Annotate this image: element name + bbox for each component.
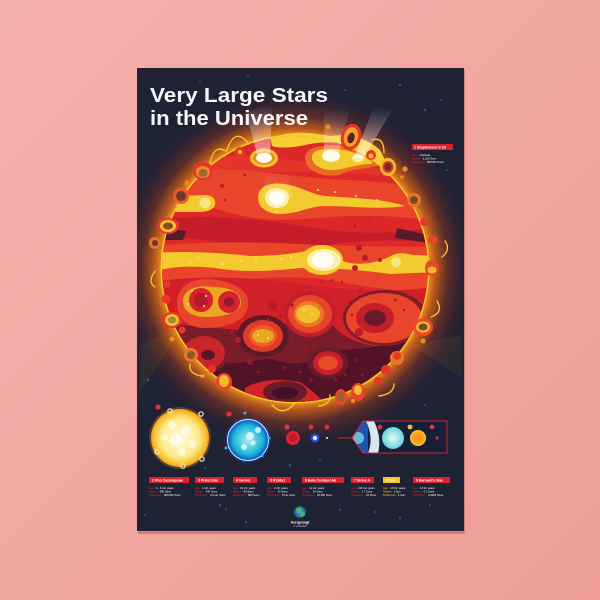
ring spot right [356,303,394,333]
hot core centre band [301,245,343,275]
bottom dark spot [263,381,307,403]
caption: R136a1: Radius: 30 Suns [267,490,288,494]
dark purple patches [165,230,186,240]
label: 1 Stephenson 2-18 [412,144,453,164]
star: Sirius A [378,425,404,449]
caption: R136a1 [267,477,296,497]
caption: Barnard's Star: Brightness: 0.0035 Suns [413,493,444,497]
caption: Barnard's Star: 9 Barnard's Star [416,478,444,482]
red giant star: Stephenson 2-18 [137,96,464,442]
caption: R136a1: 5 R136a1 [270,478,285,482]
caption: Rho Cassiopeiae: Age: 4 - 6 mil. years [149,486,174,490]
zoom callout box [338,421,447,453]
poster shadow [138,70,465,534]
light beams [246,104,272,158]
caption: Sun: 8 Sun [386,478,396,482]
logo: globe and wordmark: In a Nutshell [293,525,307,528]
star: R136a1 [309,425,320,442]
caption: Pistol Star [195,477,226,497]
caption: Sirius A: Radius: 1.7 Suns [351,490,373,494]
caption: R136a1: Brightness: 8 mil. Suns [267,493,296,497]
red lower field [162,278,427,402]
yellow side blob right [390,253,412,256]
long yellow band [162,251,428,274]
caption: Pistol Star: Age: 4 mil. years [195,486,216,490]
caption: Rho Cassiopeiae: 2 Rho Cassiopeiae [152,478,183,482]
dark red band [165,217,426,245]
small embers [170,124,426,403]
star: Beta Centauri Ab [325,425,329,439]
caption: Pistol Star: Brightness: 3.3 mil. Suns [195,493,226,497]
surface speckles dark [220,174,405,343]
caption: Sun: Brightness: 1 Sun [383,493,405,497]
light rays lower corners [139,325,185,395]
caption: Beta Centauri Ab: 6 Beta Centauri Ab [305,478,336,482]
concentric spot bottom centre [308,347,348,379]
title: in the Universe [150,108,308,130]
caption: Garnet: 4 Garnet [236,478,251,482]
star: Barnard's Star [430,425,439,440]
caption: Rho Cassiopeiae: Brightness: 500,000 Suns [149,493,181,497]
hot light pools [256,153,272,163]
caption: Beta Centauri Ab [302,477,344,497]
title [150,85,328,130]
upper mid red stripe [211,156,384,176]
lower left ember patch [184,343,226,371]
label: 1 Stephenson 2-18: Radius: 2,150 Suns [412,157,437,161]
caption: Garnet [233,477,260,497]
background star field [144,75,451,523]
caption: Sun [383,477,406,497]
label: 1 Stephenson 2-18: Age: unknown [412,153,431,157]
caption: Sirius A: Brightness: 24 Suns [351,493,376,497]
caption: Beta Centauri Ab: Age: 14 mil. years [302,486,325,490]
caption: Beta Centauri Ab: Brightness: 20,000 Suns [302,493,333,497]
orange band upper [187,170,418,220]
caption: Sirius A [351,477,376,497]
caption: Sun: Radius: 1 Sun [383,490,401,494]
caption: Sirius A: Age: 240 mil. years [351,486,375,490]
long hot stream upper [258,184,405,214]
caption: Beta Centauri Ab: Radius: 10 Suns [302,490,323,494]
caption: Garnet: Age: 10 mil. years [233,486,256,490]
star glow [137,96,464,442]
caption: R136a1: Age: 2 mil. years [267,486,288,490]
caption: Rho Cassiopeiae: Radius: 500 Suns [149,490,172,494]
caption: Garnet: Brightness: 800 Suns [233,493,260,497]
surface speckles light [187,189,378,339]
poster panel [137,68,464,531]
logo: globe and wordmark: Kurzgesagt [291,520,310,524]
star: Garnet [284,424,300,445]
label: 1 Stephenson 2-18: 1 Stephenson 2-18 [414,145,446,149]
caption: Barnard's Star: Radius: 0.2 Suns [413,490,435,494]
star: Pistol Star [224,411,271,463]
outer yellow crust [160,134,430,404]
double oval spot left [177,279,248,328]
lower dark brown region [176,324,408,402]
caption: Garnet: Radius: 84 Suns [233,490,254,494]
caption: Pistol Star: Radius: 340 Suns [195,490,218,494]
big blob right [343,290,427,346]
top hot regions [250,148,278,168]
prominence loops [149,121,439,405]
caption: Pistol Star: 3 Pistol Star [198,478,219,482]
caption: Sirius A: 7 Sirius A [354,478,370,482]
yellow blob left upper [175,195,215,212]
label: 1 Stephenson 2-18: Brightness: 830,000 Suns [412,160,444,164]
prominence arcs [151,136,447,411]
concentric spot bottom left [237,315,289,357]
concentric spot centre [284,291,336,337]
top crust overlay [270,136,337,148]
star: Sun [408,425,426,446]
orange band middle [162,242,428,292]
title: Very Large Stars [150,85,328,107]
caption: Sun: Age: 4.5 bil. years [383,486,406,490]
caption: Barnard's Star [413,477,450,497]
surface speckles deep [247,304,364,382]
logo: globe and wordmark [291,506,310,528]
caption: Rho Cassiopeiae [149,477,189,497]
star: Rho Cassiopeiae [149,404,211,469]
star surface bands [162,136,428,402]
caption: Barnard's Star: Age: 10 bil. years [413,486,435,490]
